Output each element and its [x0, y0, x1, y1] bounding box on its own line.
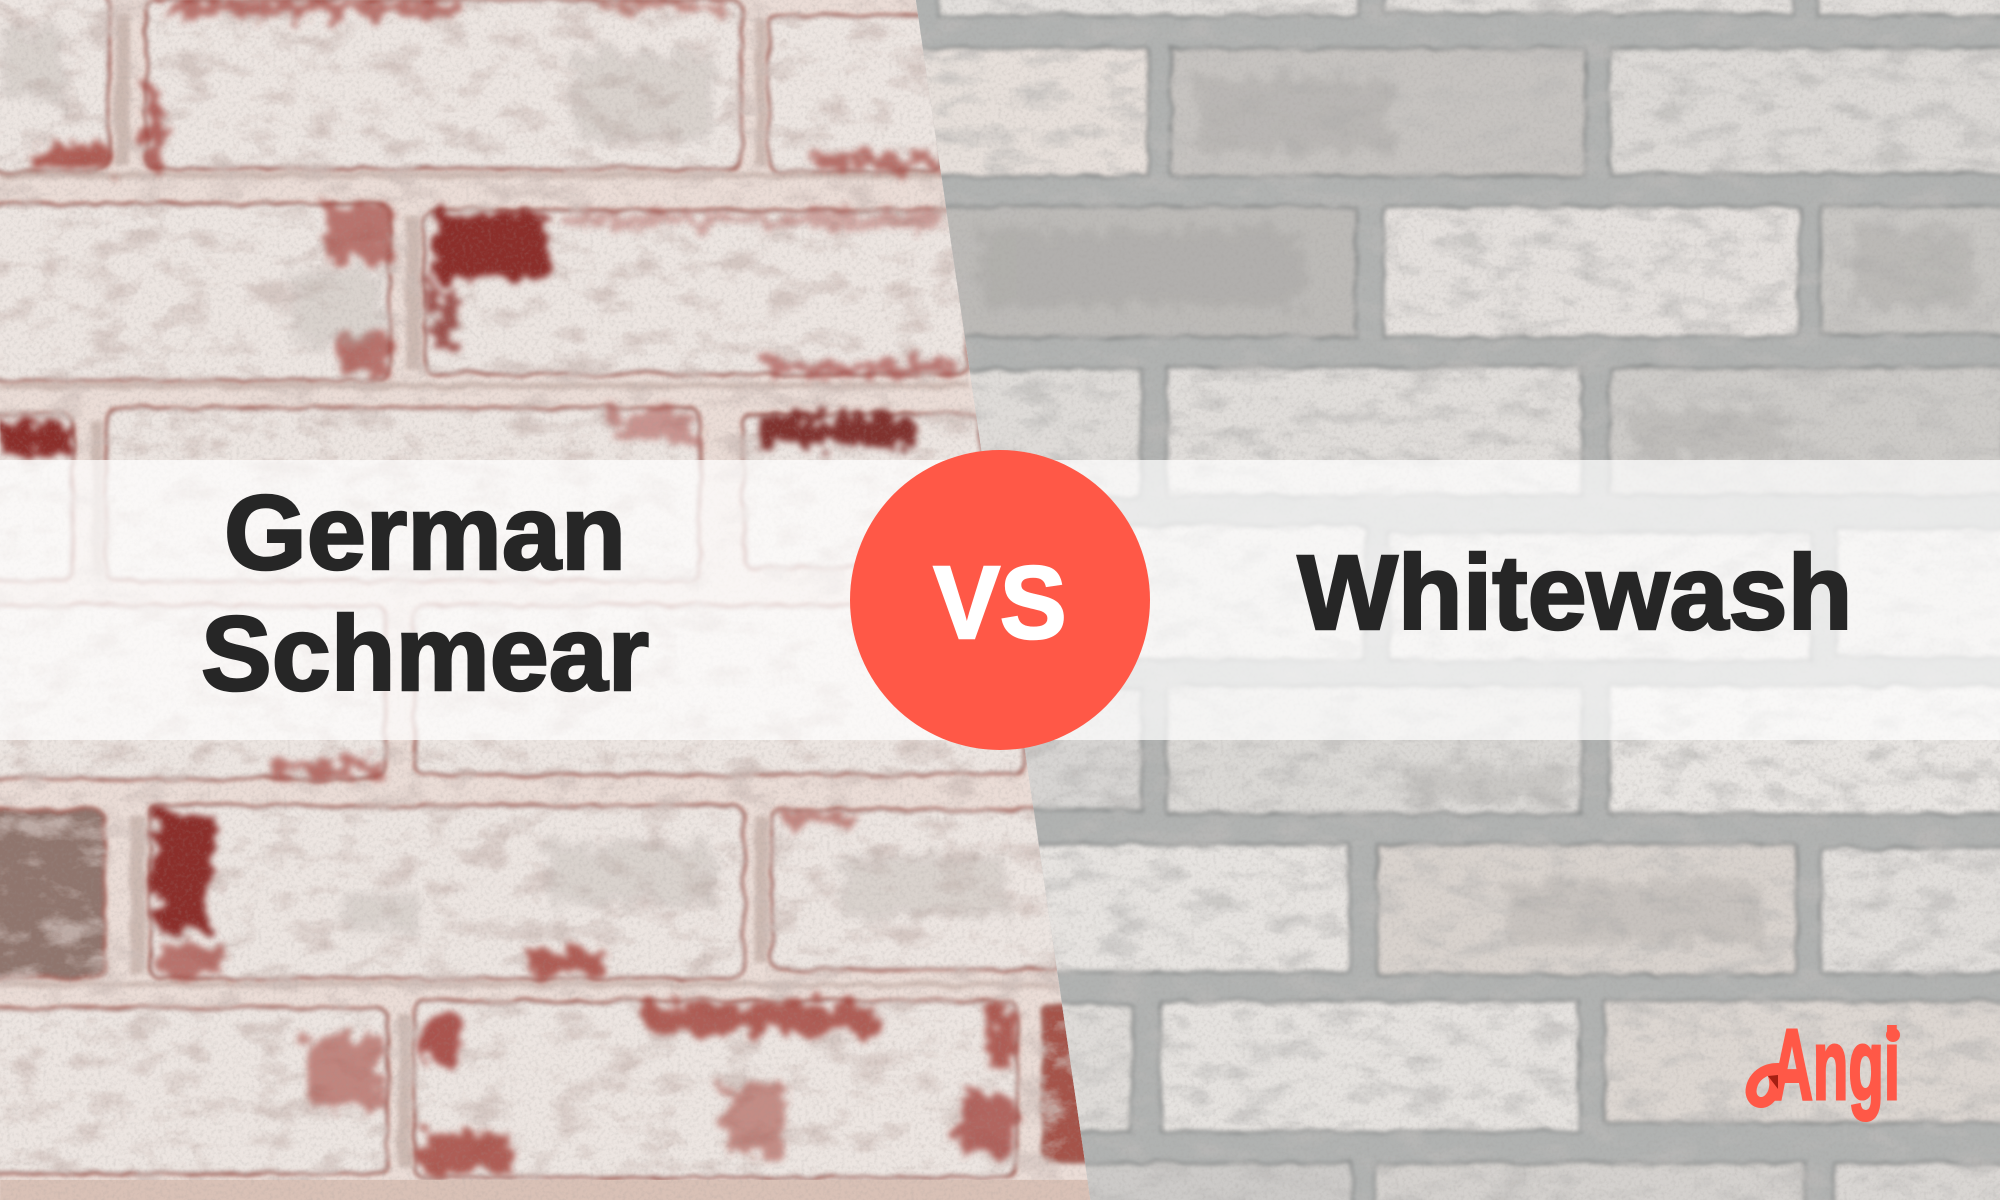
red brick showing through — [0, 0, 1014, 1173]
mottled limewash — [0, 0, 1110, 1200]
mottled limewash — [893, 0, 2000, 1200]
heading: Whitewash: Whitewash — [1298, 534, 1852, 652]
mortar shadows — [0, 13, 1059, 1167]
logo: Angi — [1751, 1009, 1900, 1121]
heading: German Schmear — [201, 474, 649, 713]
heading: German Schmear: German — [224, 474, 626, 592]
panel: German schmear brick wall — [0, 0, 1110, 1200]
logo: Angi: Angi — [1771, 1009, 1900, 1121]
heading: German Schmear: Schmear — [201, 595, 649, 713]
grey weathering — [0, 26, 1008, 931]
translucent title band — [0, 460, 2000, 740]
versus badge — [850, 450, 1150, 750]
panel: whitewash brick wall — [893, 0, 2000, 1200]
dark weathering — [982, 77, 1977, 944]
versus badge: VS — [934, 545, 1066, 660]
